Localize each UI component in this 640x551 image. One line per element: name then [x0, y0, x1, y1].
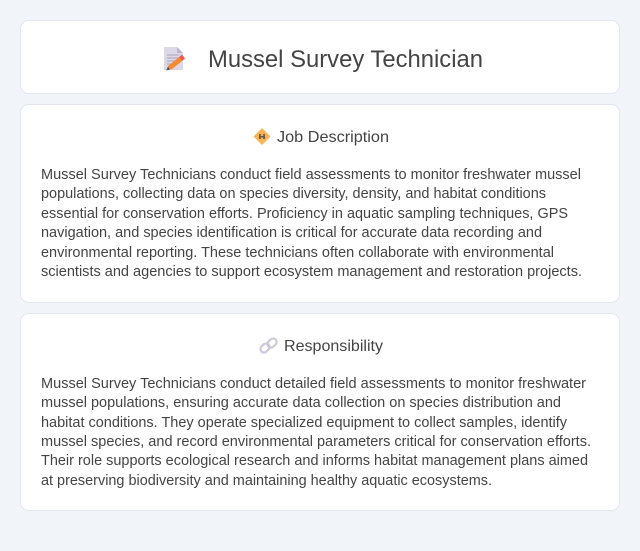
- text block: responsibility: Mussel Survey Technicians conduct detailed field assessments to monitor freshwater: [41, 376, 586, 392]
- icon: diamond road sign: [254, 129, 270, 144]
- text block: responsibility: mussel populations, ensuring accurate data collection on species distribution and: [41, 395, 561, 411]
- panel: job description: [20, 104, 620, 302]
- heading: responsibility: Responsibility: [284, 338, 383, 355]
- text block: job description: [41, 167, 582, 280]
- text block: job description: scientists and agencies to support ecosystem management and restoration projects.: [41, 264, 582, 280]
- text block: job description: Mussel Survey Technicians conduct field assessments to monitor freshwater mussel: [41, 167, 581, 183]
- panel: responsibility: [20, 314, 620, 510]
- title: Mussel Survey Technician: [208, 46, 483, 73]
- text block: responsibility: mussel species, and record environmental parameters critical for conservation efforts.: [41, 434, 591, 450]
- text block: responsibility: habitat conditions. They operate specialized equipment to collect samples, identify: [41, 415, 568, 431]
- text block: job description: navigation, and species identification is critical for accurate data recording and: [41, 225, 542, 241]
- text block: responsibility: at preserving biodiversity and maintaining healthy aquatic ecosystems.: [41, 473, 492, 489]
- heading: job description: Job Description: [277, 129, 389, 146]
- icon: chain link: [259, 337, 278, 354]
- icon: document with pencil: [164, 47, 184, 70]
- text block: responsibility: [41, 376, 591, 489]
- text block: job description: essential for conservation efforts. Proficiency in aquatic sampling techniques, GPS: [41, 206, 568, 222]
- text block: job description: environmental reporting. These technicians often collaborate with environmental: [41, 245, 554, 261]
- text block: responsibility: Their role supports ecological research and informs habitat management plans aimed: [41, 453, 588, 469]
- text block: job description: populations, collecting data on species diversity, density, and habitat conditions: [41, 186, 546, 202]
- panel: title card: [20, 20, 620, 94]
